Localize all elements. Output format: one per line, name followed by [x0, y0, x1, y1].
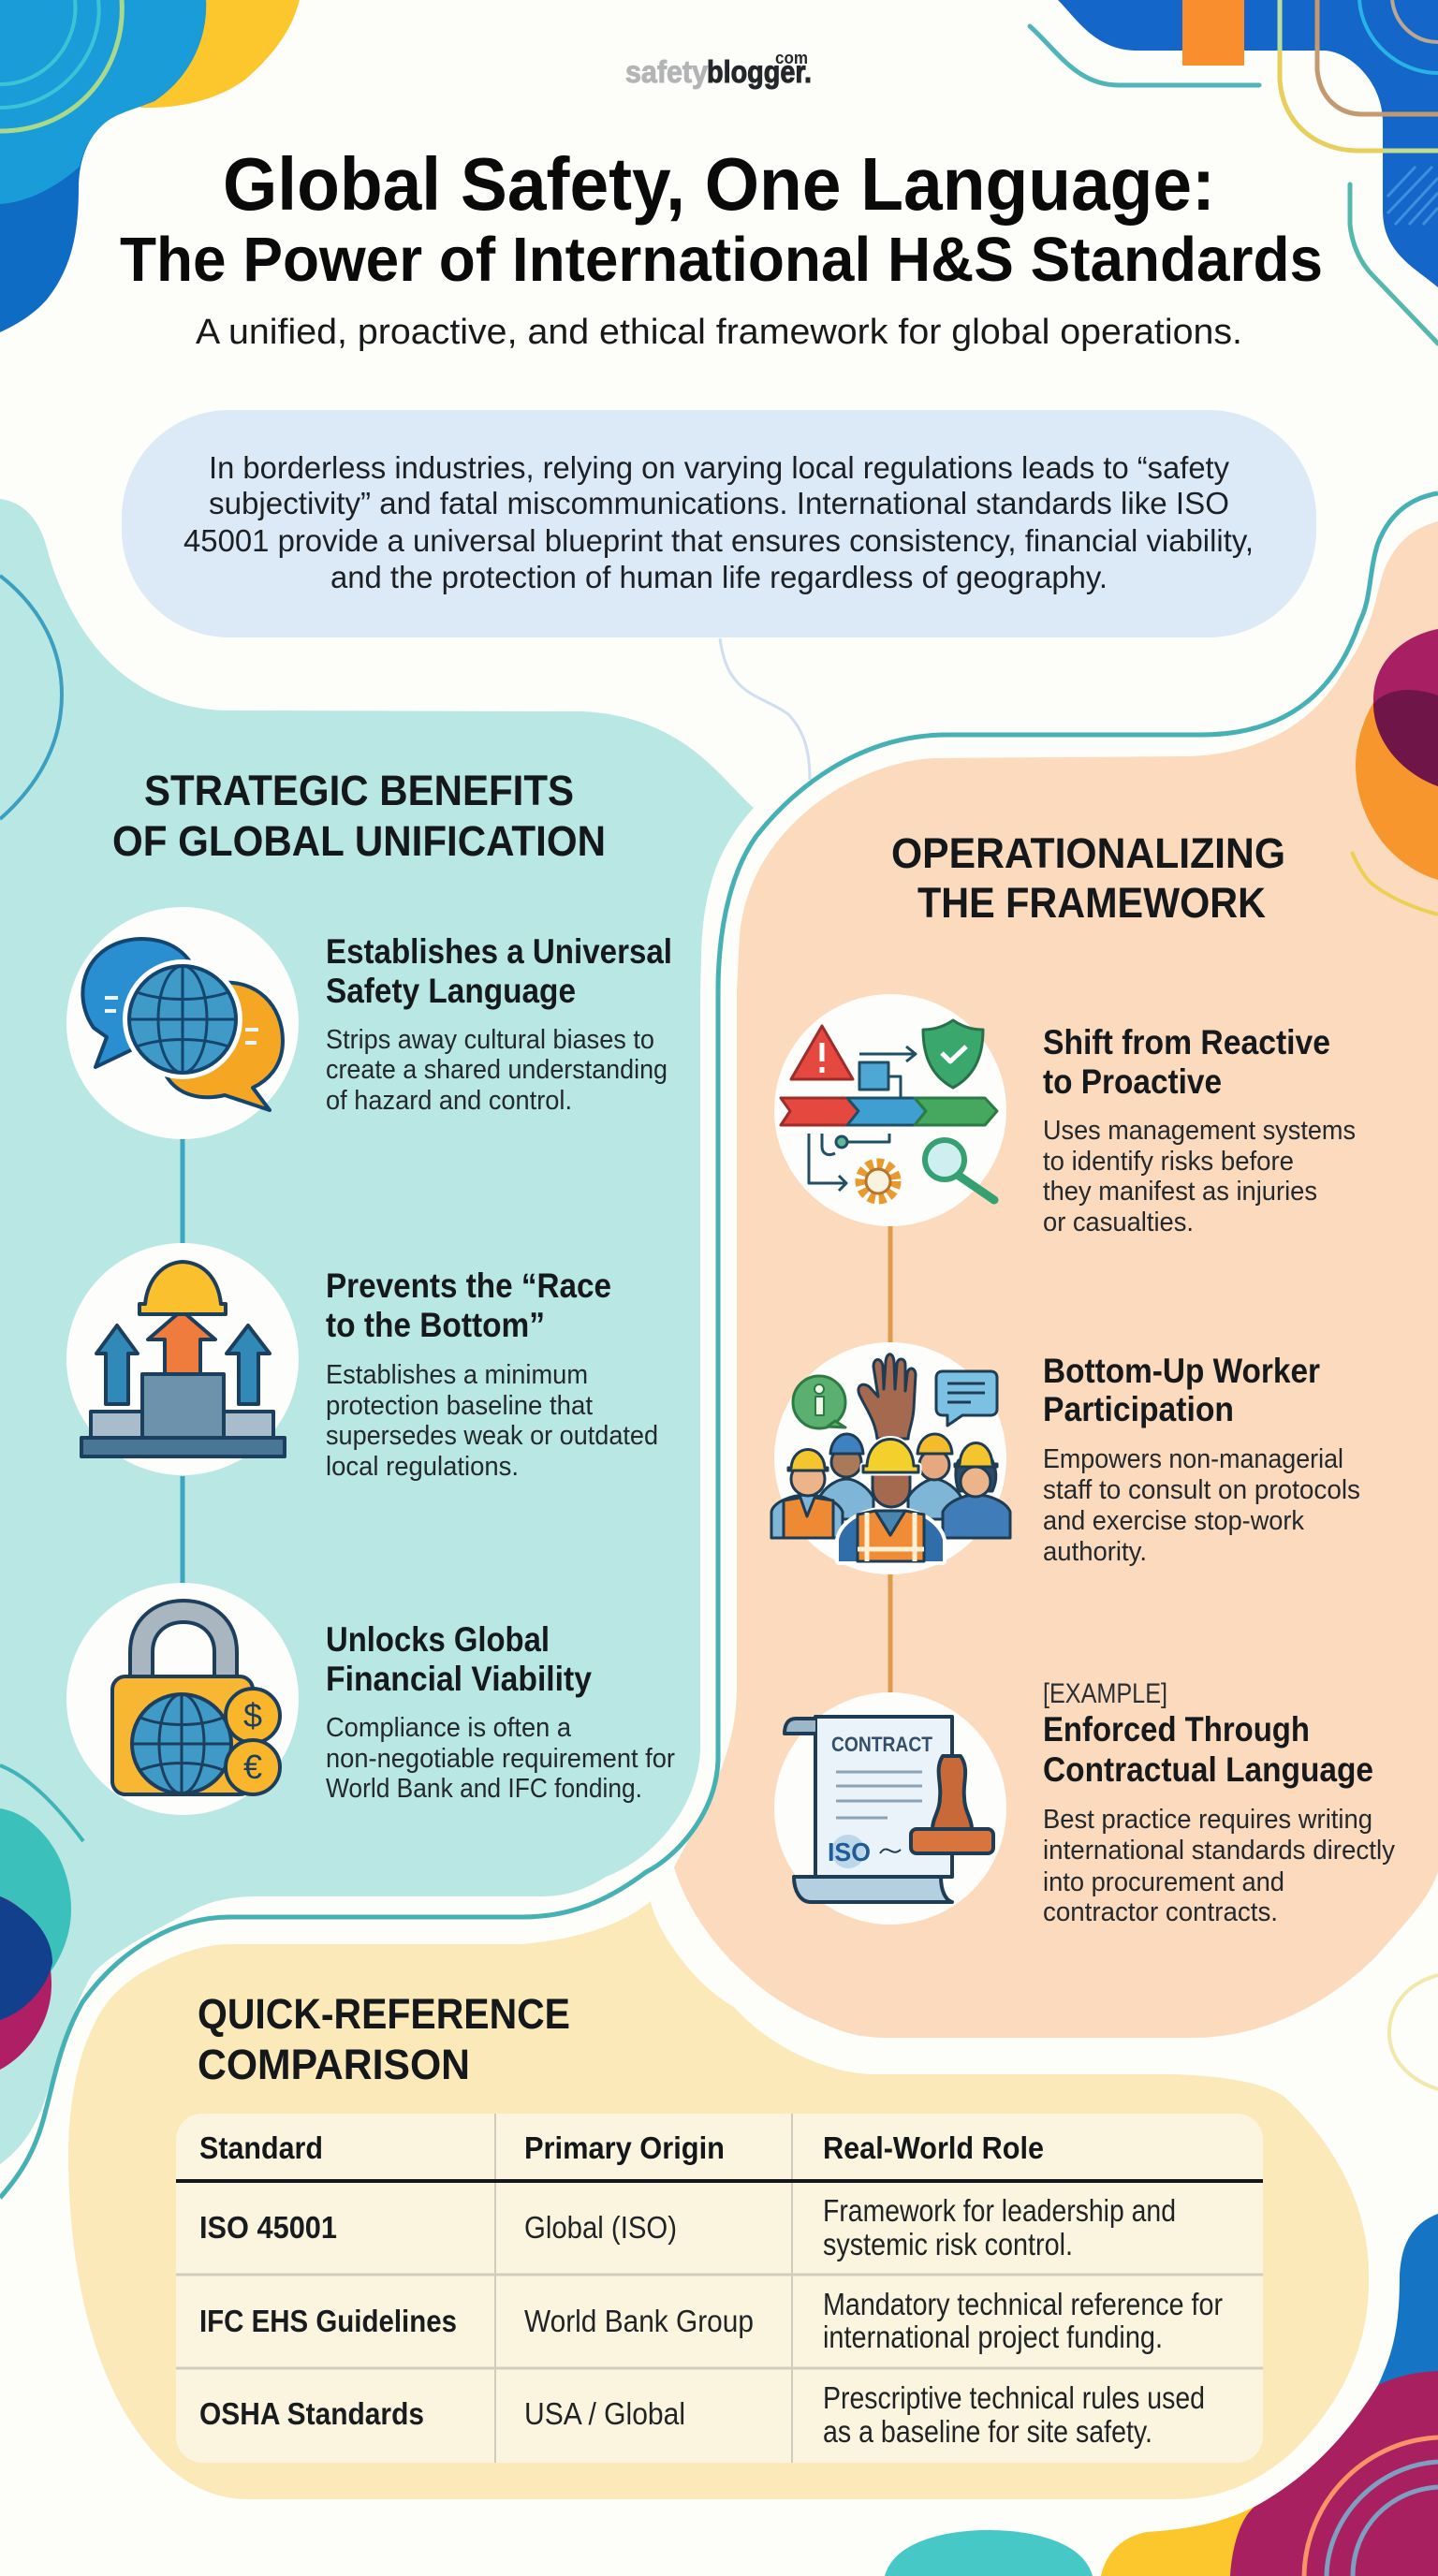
- panel: introduction: 45001 provide a universal blueprint that ensures consistency, financial viability,: [183, 523, 1254, 558]
- row: IFC EHS Guidelines: Mandatory technical reference for: [823, 2287, 1223, 2321]
- heading: operationalizing: OPERATIONALIZING: [891, 829, 1285, 877]
- row: ISO 45001: systemic risk control.: [823, 2227, 1073, 2261]
- row: IFC EHS Guidelines: World Bank Group: [524, 2304, 754, 2338]
- operational step 1: to Proactive: [1043, 1062, 1222, 1101]
- operational step 2: [771, 1342, 1360, 1574]
- benefit 2: [66, 1243, 658, 1482]
- comparison table: [176, 2114, 1263, 2463]
- operational step 2: and exercise stop-work: [1043, 1506, 1304, 1536]
- operational step 2: authority.: [1043, 1537, 1147, 1567]
- icon: speech bubbles with globe: [82, 939, 283, 1110]
- row: OSHA Standards: as a baseline for site safety.: [823, 2414, 1152, 2449]
- decoration: left-middle arc: [0, 576, 62, 819]
- operational step 3: international standards directly: [1043, 1836, 1395, 1866]
- decoration: bottom-left circles: [0, 1765, 83, 2070]
- row: ISO 45001: [199, 2193, 1176, 2261]
- panel: introduction: and the protection of human life regardless of geography.: [330, 560, 1108, 594]
- operational step 3: contractor contracts.: [1043, 1897, 1278, 1927]
- operational step 3: Contractual Language: [1043, 1750, 1373, 1789]
- benefit 3: non-negotiable requirement for: [326, 1744, 675, 1774]
- benefit 2: supersedes weak or outdated: [326, 1421, 658, 1451]
- benefit 3: Financial Viability: [326, 1660, 592, 1698]
- icon: process flow: [781, 1020, 997, 1200]
- heading: operationalizing: THE FRAMEWORK: [917, 879, 1266, 927]
- heading: quick reference: COMPARISON: [198, 2041, 470, 2088]
- icon: workers with raised hand: [771, 1354, 1010, 1561]
- benefit 1: of hazard and control.: [326, 1086, 572, 1116]
- operational step 1: or casualties.: [1043, 1208, 1194, 1237]
- operational step 1: they manifest as injuries: [1043, 1177, 1317, 1207]
- heading: strategic benefits: [112, 767, 606, 865]
- benefit 3: Unlocks Global: [326, 1620, 550, 1659]
- row: OSHA Standards: Prescriptive technical rules used: [823, 2380, 1205, 2415]
- operational step 1: [774, 994, 1356, 1237]
- row: ISO 45001: Framework for leadership and: [823, 2193, 1176, 2228]
- title: [120, 142, 1323, 295]
- icon: padlock with globe and coins: [112, 1601, 280, 1794]
- benefit 3: World Bank and IFC fonding.: [326, 1774, 642, 1804]
- heading: strategic benefits: OF GLOBAL UNIFICATION: [112, 817, 606, 865]
- benefit 2: local regulations.: [326, 1452, 519, 1482]
- panel: quick reference background: [68, 1901, 1369, 2499]
- icon: rising baseline with hard hat: [81, 1262, 285, 1456]
- operational step 3: [774, 1678, 1395, 1927]
- benefit 1: create a shared understanding: [326, 1055, 668, 1085]
- operational step 2: Bottom-Up Worker: [1043, 1352, 1320, 1390]
- operational step 2: Participation: [1043, 1390, 1234, 1428]
- row: IFC EHS Guidelines: [199, 2287, 1223, 2354]
- table header: Standard: [199, 2130, 323, 2165]
- heading: strategic benefits: STRATEGIC BENEFITS: [144, 767, 574, 814]
- operational step 3: Best practice requires writing: [1043, 1805, 1372, 1835]
- logo: safety: [625, 54, 709, 89]
- row: IFC EHS Guidelines: international project funding.: [823, 2320, 1163, 2354]
- panel: strategic benefits background: [0, 499, 754, 2164]
- row: ISO 45001: Global (ISO): [524, 2210, 677, 2245]
- connector: right timeline: [888, 1225, 893, 1693]
- panel: introduction: subjectivity” and fatal miscommunications. International standards like ISO: [209, 486, 1229, 520]
- benefit 3: $: [243, 1696, 262, 1734]
- heading: quick reference: [198, 1990, 570, 2088]
- benefit 3: [66, 1583, 675, 1815]
- panel: operationalizing background: [674, 521, 1438, 2038]
- subtitle: A unified, proactive, and ethical framework for global operations.: [196, 313, 1242, 352]
- benefit 3: Compliance is often a: [326, 1713, 572, 1743]
- operational step 3: ISO: [828, 1837, 871, 1866]
- operational step 1: Uses management systems: [1043, 1116, 1356, 1146]
- table header: Real-World Role: [823, 2130, 1044, 2165]
- benefit 2: Prevents the “Race: [326, 1266, 611, 1305]
- decoration: right-middle circles: [1352, 629, 1438, 915]
- benefit 1: Safety Language: [326, 972, 576, 1010]
- operational step 1: Shift from Reactive: [1043, 1023, 1330, 1061]
- decoration: pale connector curve: [720, 638, 810, 780]
- table header: [199, 2130, 1044, 2165]
- benefit 2: Establishes a minimum: [326, 1360, 588, 1390]
- decoration: top-right blobs and curves: [1030, 0, 1438, 344]
- benefit 3: €: [243, 1748, 262, 1786]
- benefit 1: Establishes a Universal: [326, 932, 672, 971]
- heading: quick reference: QUICK-REFERENCE: [198, 1990, 570, 2038]
- logo: [625, 49, 812, 89]
- row: OSHA Standards: OSHA Standards: [199, 2396, 424, 2431]
- logo: blogger.: [707, 54, 812, 89]
- benefit 2: protection baseline that: [326, 1391, 593, 1421]
- panel: introduction: [122, 410, 1316, 637]
- benefit 2: to the Bottom”: [326, 1306, 545, 1344]
- operational step 3: into procurement and: [1043, 1867, 1284, 1897]
- decoration: bottom-right blobs and rings: [885, 1975, 1438, 2576]
- title: Global Safety, One Language:: [223, 142, 1215, 226]
- row: OSHA Standards: USA / Global: [524, 2396, 685, 2431]
- table header: Primary Origin: [524, 2130, 725, 2165]
- benefit 1: [66, 907, 672, 1139]
- benefit 1: Strips away cultural biases to: [326, 1025, 654, 1055]
- decoration: teal flowing line: [0, 493, 1438, 2198]
- operational step 3: Enforced Through: [1043, 1710, 1310, 1749]
- connector: left timeline: [180, 1139, 185, 1583]
- operational step 3: [EXAMPLE]: [1043, 1678, 1167, 1709]
- title: The Power of International H&S Standards: [120, 225, 1323, 295]
- row: IFC EHS Guidelines: IFC EHS Guidelines: [199, 2304, 457, 2338]
- operational step 2: Empowers non-managerial: [1043, 1444, 1343, 1474]
- icon: contract with stamp: [785, 1717, 993, 1902]
- operational step 2: staff to consult on protocols: [1043, 1475, 1360, 1505]
- panel: introduction: In borderless industries, relying on varying local regulations leads to “safety: [209, 450, 1229, 485]
- row: OSHA Standards: [199, 2380, 1205, 2449]
- operational step 3: CONTRACT: [831, 1733, 932, 1756]
- logo: com: [775, 49, 808, 67]
- operational step 1: to identify risks before: [1043, 1147, 1294, 1177]
- heading: operationalizing: [891, 829, 1285, 927]
- row: ISO 45001: ISO 45001: [199, 2210, 337, 2245]
- decoration: top-left blobs: [0, 0, 300, 332]
